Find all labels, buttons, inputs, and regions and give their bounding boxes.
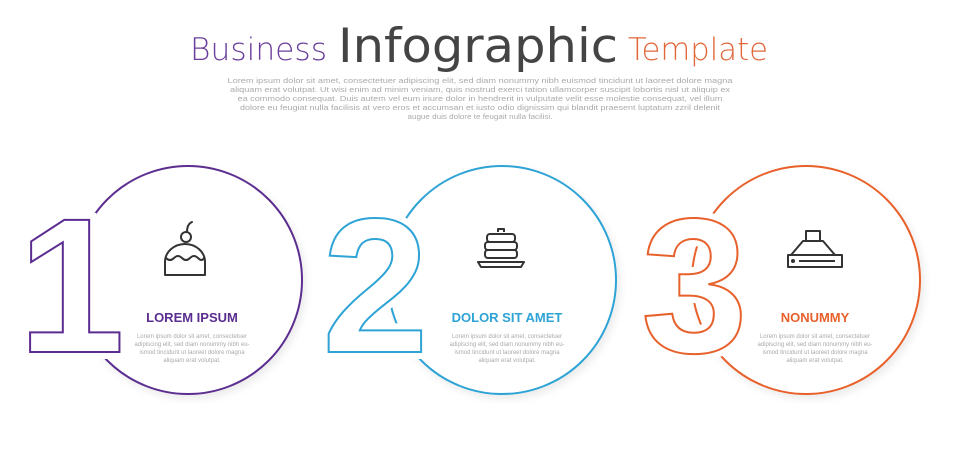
step 2: 2 xyxy=(322,178,429,393)
body text 2: aliquam erat volutpat. xyxy=(478,358,536,364)
icon: pancakes xyxy=(478,229,524,267)
body text 3 xyxy=(757,334,873,364)
body text 1 xyxy=(134,334,250,364)
intro text: dolore eu feugiat nulla facilisis at vero eros et accumsan et iusto odio dignissim qui blandit praesent luptatum zzril delenit xyxy=(240,103,720,112)
icon: cake xyxy=(165,222,205,275)
body text 1: adipiscing elit, sed diam nonummy nibh eu- xyxy=(134,342,250,348)
step 3: 3 xyxy=(641,178,748,393)
step 3 xyxy=(641,166,920,394)
body text 1: ismod tincidunt ut laoreet dolore magna xyxy=(139,350,245,356)
body text 2: adipiscing elit, sed diam nonummy nibh eu- xyxy=(449,342,565,348)
intro text: augue duis dolore te feugait nulla facilisi. xyxy=(408,112,552,121)
body text 2: ismod tincidunt ut laoreet dolore magna xyxy=(454,350,560,356)
step 1: 1 xyxy=(18,178,125,393)
title: Infographic xyxy=(338,19,618,74)
heading: nonummy: NONUMMY xyxy=(781,310,850,325)
body text 3: adipiscing elit, sed diam nonummy nibh eu- xyxy=(757,342,873,348)
body text 3: Lorem ipsum dolor sit amet, consectetuer xyxy=(760,334,870,340)
step 2 xyxy=(322,166,616,394)
intro text: Lorem ipsum dolor sit amet, consectetuer adipiscing elit, sed diam nonummy nibh euismod tincidunt ut laoreet dolore magna xyxy=(228,76,734,85)
step 1 xyxy=(18,166,302,394)
body text 3: ismod tincidunt ut laoreet dolore magna xyxy=(762,350,868,356)
title: Business xyxy=(190,32,327,68)
body text 2 xyxy=(449,334,565,364)
body text 3: aliquam erat volutpat. xyxy=(786,358,844,364)
body text 1: aliquam erat volutpat. xyxy=(163,358,221,364)
title xyxy=(190,19,768,74)
heading: lorem ipsum: LOREM IPSUM xyxy=(146,310,238,325)
intro text xyxy=(228,76,734,121)
heading: dolor sit amet: DOLOR SIT AMET xyxy=(452,310,562,325)
step 1: 1 xyxy=(18,178,125,393)
step 3: 3 xyxy=(641,178,748,393)
intro text: aliquam erat volutpat. Ut wisi enim ad minim veniam, quis nostrud exerci tation ullamcorper suscipit lobortis nisl ut aliquip ex xyxy=(230,85,730,94)
step 2: 2 xyxy=(322,178,429,393)
icon: kitchen hood xyxy=(788,231,842,267)
intro text: ea commodo consequat. Duis autem vel eum iriure dolor in hendrerit in vulputate velit esse molestie consequat, vel illum xyxy=(238,94,722,103)
body text 1: Lorem ipsum dolor sit amet, consectetuer xyxy=(137,334,247,340)
title: Template xyxy=(628,32,768,68)
body text 2: Lorem ipsum dolor sit amet, consectetuer xyxy=(452,334,562,340)
